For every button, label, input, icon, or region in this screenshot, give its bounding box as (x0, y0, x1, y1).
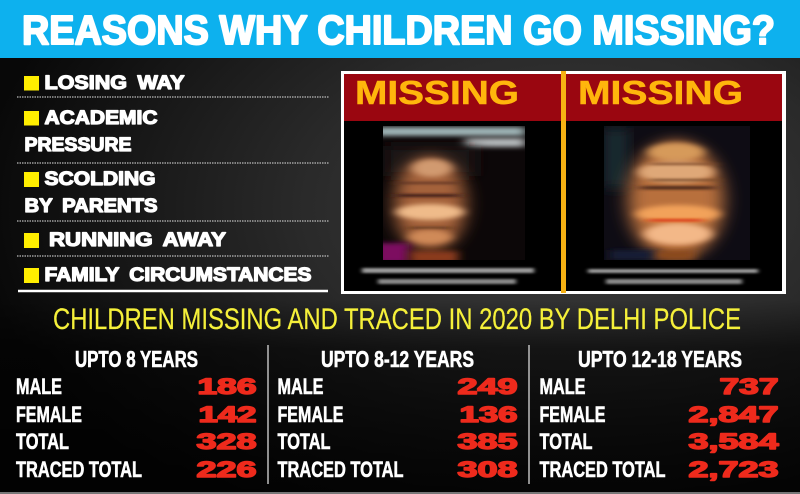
table column: upto 12-18 years: MALE (540, 374, 586, 399)
table column: upto 8 years (16, 346, 256, 482)
table column: upto 12-18 years: UPTO 12-18 YEARS (578, 346, 742, 372)
table column: upto 12-18 years: TRACED TOTAL (540, 457, 666, 482)
reason: scolding by parents (24, 169, 158, 217)
blurred photo 1 (375, 126, 525, 263)
table column: upto 8 years: FEMALE (16, 402, 82, 427)
table column: upto 8-12 years: TRACED TOTAL (278, 457, 404, 482)
table column: upto 8 years: 226 (196, 457, 256, 482)
table column: upto 8-12 years: FEMALE (278, 402, 344, 427)
table column: upto 8-12 years: 308 (458, 457, 518, 482)
table column: upto 8-12 years: 249 (458, 374, 518, 399)
blurred photo 2 (604, 126, 750, 260)
blurred caption 1 (362, 268, 534, 284)
table column: upto 12-18 years: 3,584 (688, 429, 780, 454)
table column: upto 12-18 years (540, 346, 780, 482)
reason: running away: RUNNING AWAY (49, 230, 226, 251)
divider (561, 71, 566, 293)
poster 1 header: MISSING (355, 74, 519, 111)
panel: reasons list (17, 73, 329, 291)
table column: upto 12-18 years: 737 (720, 374, 778, 399)
table column: upto 8-12 years: 385 (458, 429, 518, 454)
table column: upto 12-18 years: 2,723 (688, 457, 778, 482)
table column: upto 8-12 years: MALE (278, 374, 324, 399)
reason: losing way: LOSING WAY (44, 73, 185, 94)
panel: missing posters (341, 71, 786, 294)
table column: upto 8 years: 186 (198, 374, 256, 399)
table column: upto 8 years: MALE (16, 374, 62, 399)
reason: academic pressure (24, 108, 158, 156)
table column: upto 8 years: 142 (198, 402, 256, 427)
table column: upto 8 years: 328 (196, 429, 256, 454)
table column: upto 8 years: UPTO 8 YEARS (75, 346, 198, 372)
reason: scolding by parents: SCOLDING (44, 169, 156, 190)
table column: upto 8-12 years (278, 346, 518, 482)
table column: upto 8 years: TRACED TOTAL (16, 457, 142, 482)
table column: upto 12-18 years: FEMALE (540, 402, 606, 427)
poster 1 header (344, 74, 561, 121)
table column: upto 8-12 years: TOTAL (278, 429, 330, 454)
table column: upto 12-18 years: TOTAL (540, 429, 592, 454)
table column: upto 8 years: TOTAL (16, 429, 69, 454)
reason: academic pressure: ACADEMIC (44, 108, 158, 129)
reason: academic pressure: PRESSURE (24, 135, 132, 156)
table column: upto 8-12 years: 136 (460, 402, 518, 427)
blurred caption 2 (588, 269, 758, 284)
table column: upto 8-12 years: UPTO 8-12 YEARS (321, 346, 474, 372)
poster 2 header (566, 74, 782, 121)
table column: upto 12-18 years: 2,847 (688, 402, 778, 427)
reason: family circumstances: FAMILY CIRCUMSTANCES (44, 265, 312, 286)
poster 2 header: MISSING (578, 74, 743, 111)
reason: scolding by parents: BY PARENTS (24, 196, 158, 217)
